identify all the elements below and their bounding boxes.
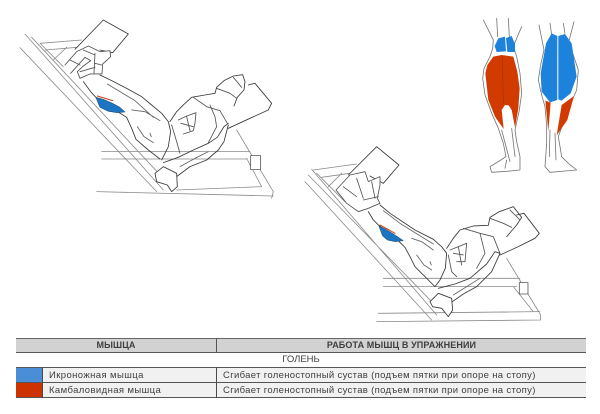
feet [336, 172, 380, 212]
muscle name: gastrocnemius: Икроножная мышца [49, 370, 144, 381]
foot plate [75, 20, 128, 53]
row: soleus [16, 382, 586, 398]
hand [430, 293, 453, 317]
icon: highlighted calf muscle [379, 225, 403, 242]
table header: muscle: МЫШЦА [96, 340, 136, 350]
table header: muscle work [216, 338, 586, 353]
row: gastrocnemius [16, 367, 586, 382]
icon: highlighted calf muscle [96, 96, 125, 113]
machine frame [305, 164, 541, 322]
legs [380, 205, 447, 287]
column divider [216, 367, 217, 398]
hand [155, 167, 177, 192]
muscle name: soleus: Камбаловидная мышца [49, 385, 161, 396]
torso and head [170, 75, 245, 122]
feet [65, 46, 111, 78]
right leg, gastrocnemius view [538, 22, 578, 172]
section label: lower leg: ГОЛЕНЬ [282, 354, 320, 365]
muscle action: soleus: Сгибает голеностопный сустав (подъем пятки при опоре на стопу) [223, 385, 536, 396]
muscle action: gastrocnemius: Сгибает голеностопный сустав (подъем пятки при опоре на стопу) [223, 370, 536, 381]
bench [500, 213, 539, 255]
arm [163, 123, 228, 177]
machine frame [20, 34, 273, 198]
torso and head [447, 207, 522, 248]
foot plate [348, 147, 399, 183]
illustration: leg press, lower position [20, 20, 273, 198]
legs [100, 75, 171, 160]
legend swatch: blue [16, 368, 42, 382]
table header: muscle work: РАБОТА МЫШЦ В УПРАЖНЕНИИ [327, 340, 476, 350]
legend swatch: red [16, 383, 42, 397]
arm [438, 252, 500, 303]
bench [228, 83, 272, 128]
illustration: leg press, upper position [305, 147, 541, 322]
table header: muscle [16, 338, 216, 353]
illustration: calf muscles anatomy [483, 18, 578, 172]
muscle table [16, 338, 586, 398]
swatch divider [42, 367, 43, 398]
left leg, soleus view [483, 18, 522, 172]
